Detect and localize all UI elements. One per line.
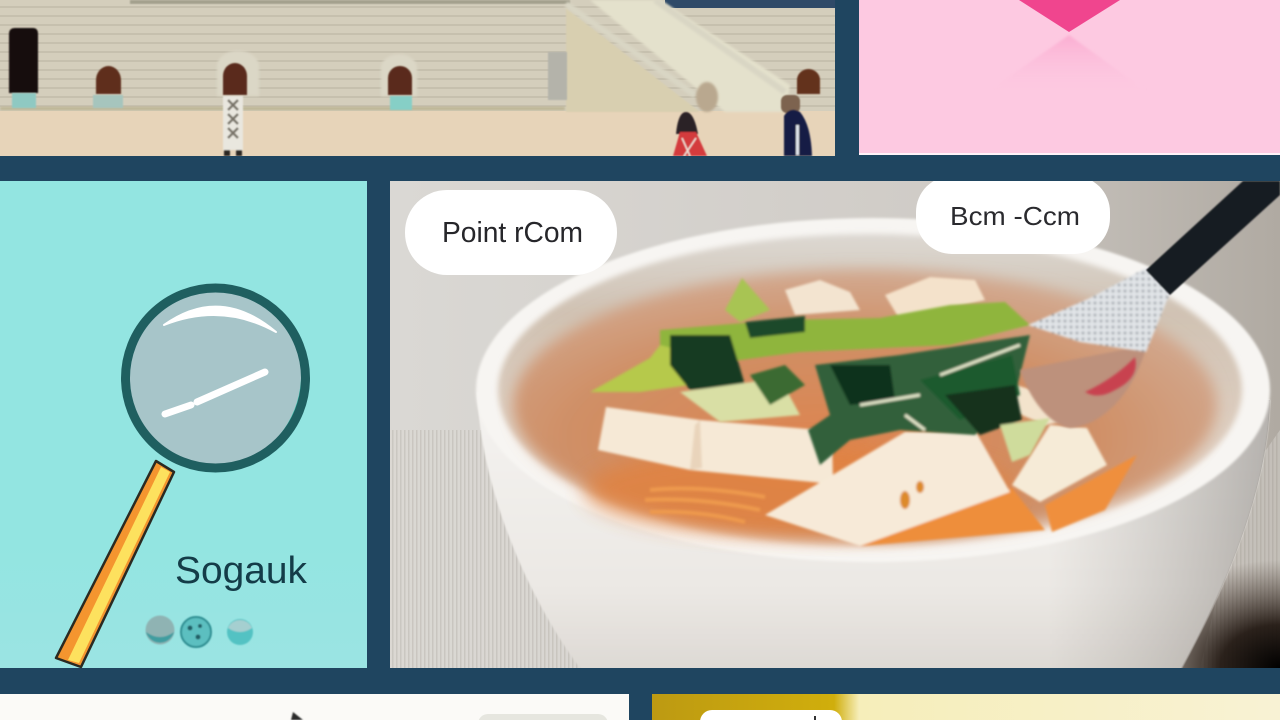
stone lion [696,82,718,112]
heart tip [1019,0,1120,32]
spoon handle [1146,181,1280,295]
tablecloth texture right [1212,430,1280,623]
door 3 [388,66,412,95]
bubble: Point rCom: Point rCom [442,217,583,249]
arch frame 2 [217,51,259,96]
metal gate [548,52,567,100]
bowl body [477,392,1270,675]
tall dark doorway [9,28,38,93]
person in checked clothes [223,96,243,156]
teal background [0,181,367,668]
white background [0,694,629,720]
stair side [566,8,700,112]
bowl right shade [1086,400,1270,668]
panel: teal magnifier [0,181,367,668]
tablecloth texture left [392,430,578,668]
roof edge [130,0,570,4]
right door [797,69,820,94]
teal base 1 [12,93,36,108]
stone wall [0,0,835,111]
door 2 [223,63,247,95]
table background [390,181,1280,668]
bubble: Bcm-Ccm [916,176,1110,254]
label: Sogauk: Sogauk [175,550,308,592]
bubble: Point rCom [405,190,617,275]
heart reflection [990,35,1145,90]
gray pill [478,714,608,720]
small door 1 [96,66,121,94]
dark mark [814,716,816,720]
dark icon tip [291,712,303,720]
courtyard ground [0,111,835,156]
panel: bottom right yellow [652,694,1280,720]
staircase [590,0,790,112]
wall base line [0,107,565,110]
dark table corner [1181,564,1280,668]
spoon bowl [1020,345,1147,428]
bowl inner wall [498,234,1242,546]
panel: pink heart [859,0,1280,155]
panel: palace courtyard photo [0,0,835,156]
person in navy [781,95,812,156]
bowl rim [476,218,1270,562]
yellow background [652,694,1280,720]
white label pill [700,710,842,720]
panel: soup photo [390,176,1280,675]
spoon red reflection [1085,357,1136,396]
spoon neck [1028,268,1170,352]
icon: bubble dots [146,616,253,647]
bubble: Bcm-Ccm: Bcm -Ccm [950,201,1080,231]
pink background [859,0,1280,155]
teal base 2 [93,95,123,108]
arch frame 3 [381,54,417,96]
stair railing [566,0,785,95]
sky strip [665,0,835,8]
broth [513,269,1217,541]
teal base 3 [390,96,412,110]
icon: magnifier handle [56,461,174,667]
greens [590,278,1050,465]
broth warm shadow [585,445,1015,535]
icon: magnifier lens [126,288,306,468]
tofu pieces [598,277,1137,546]
person in red [673,112,707,156]
bottom highlight [859,153,1280,155]
panel: bottom left white [0,694,629,720]
noodles [645,489,765,522]
